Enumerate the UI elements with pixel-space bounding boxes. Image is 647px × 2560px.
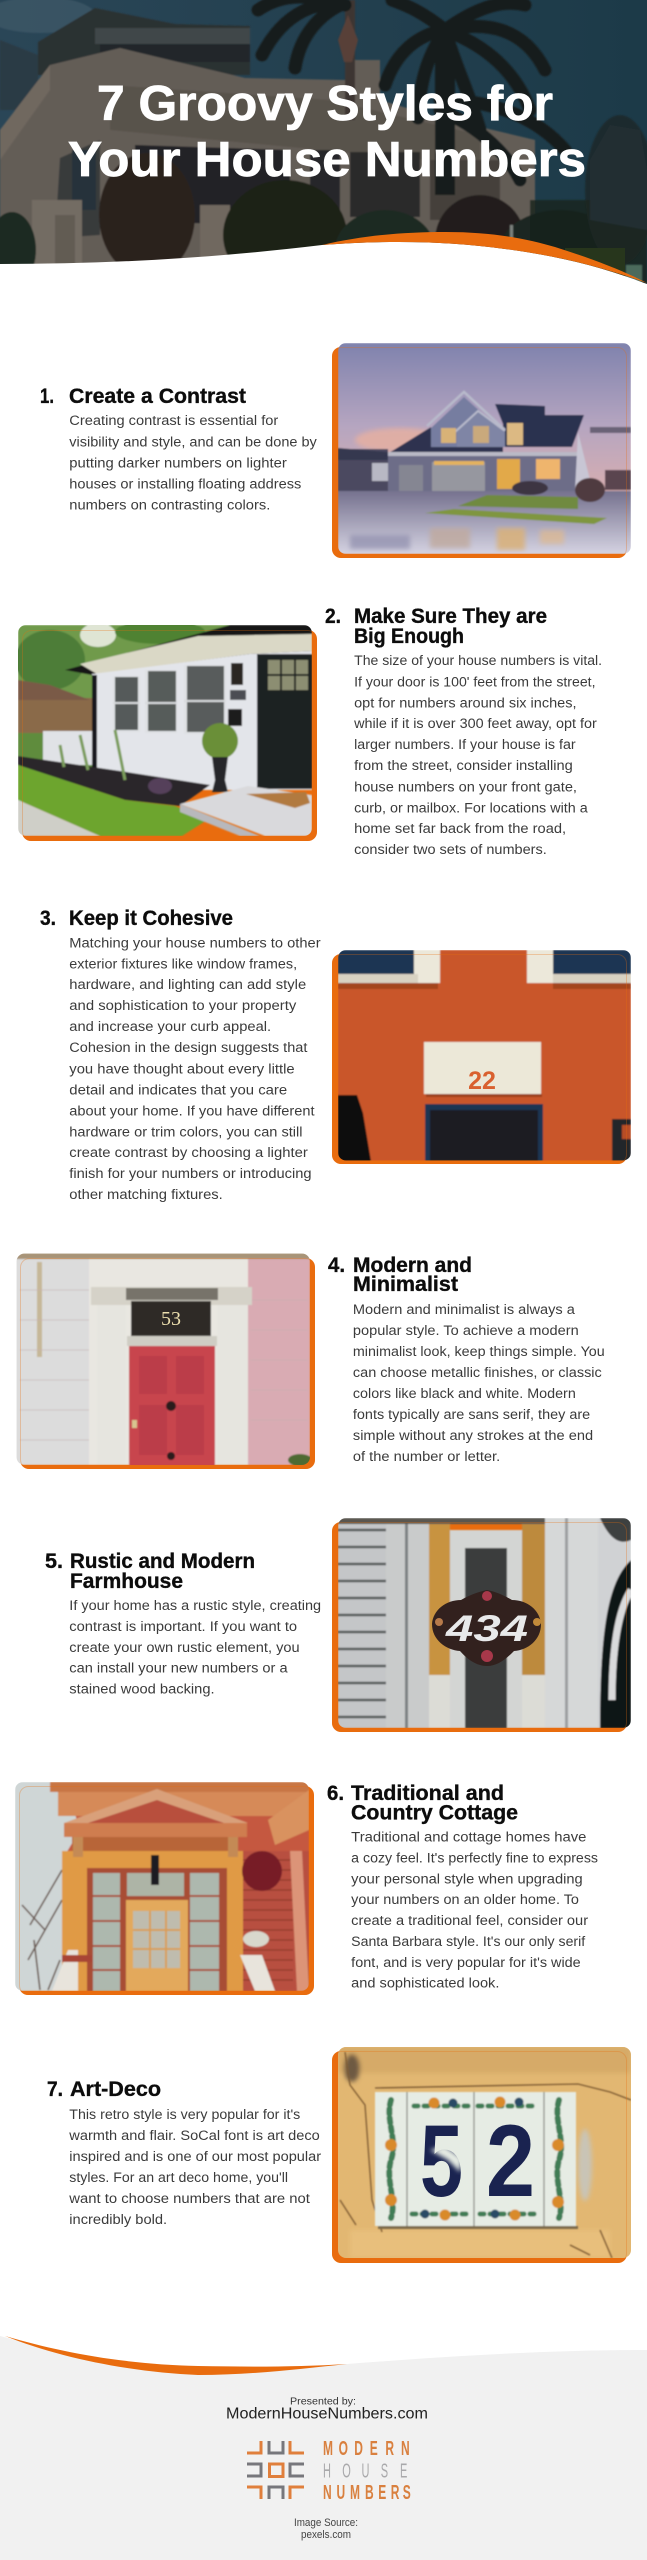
heading 2: Make Sure They are: [354, 605, 547, 628]
body text 1: visibility and style, and can be done by: [69, 434, 317, 449]
section 3: Keep it Cohesive: [40, 907, 631, 1202]
house number 52: 5: [420, 2104, 463, 2218]
body text 3: and sophistication to your property: [69, 998, 297, 1013]
body text 6: [351, 1830, 598, 1991]
body text 5: If your home has a rustic style, creating: [69, 1598, 321, 1613]
body text 5: stained wood backing.: [69, 1682, 215, 1696]
body text 2: If your door is 100' feet from the street,: [354, 674, 596, 689]
body text 2: from the street, consider installing: [354, 758, 573, 773]
house number 22: 22: [468, 1067, 496, 1095]
header wave: white curve: [0, 242, 647, 300]
body text 3: and increase your curb appeal.: [69, 1019, 271, 1034]
body text 7: styles. For an art deco home, you'll: [69, 2170, 288, 2185]
body text 5: create your own rustic element, you: [69, 1640, 300, 1655]
heading 4: 4.: [328, 1254, 345, 1277]
heading 3: Keep it Cohesive: [69, 907, 233, 930]
body text 4: popular style. To achieve a modern: [353, 1323, 579, 1338]
body text 2: curb, or mailbox. For locations with a: [354, 800, 588, 815]
heading 5: Farmhouse: [70, 1570, 183, 1593]
body text 2: opt for numbers around six inches,: [354, 695, 576, 710]
heading 7: Art-Deco: [70, 2078, 161, 2101]
logo wordmark: HOUSE: [323, 2460, 407, 2482]
body text 7: inspired and is one of our most popular: [69, 2149, 322, 2164]
footer wave: orange accent: [5, 2336, 347, 2375]
body text 3: create contrast by choosing a lighter: [69, 1145, 308, 1160]
heading 2: [325, 605, 547, 648]
body text 6: and sophisticated look.: [351, 1976, 499, 1991]
body text 6: Santa Barbara style. It's our only serif: [351, 1934, 585, 1949]
body text 2: home set far back from the road,: [354, 821, 566, 836]
heading 6: Country Cottage: [351, 1801, 518, 1824]
section 7: Art-Deco: [47, 2047, 631, 2263]
body text 4: Modern and minimalist is always a: [353, 1302, 575, 1317]
body text 2: [353, 653, 602, 857]
heading 6: Traditional and: [351, 1782, 504, 1805]
house number 434: 434: [445, 1608, 528, 1649]
body text 3: [69, 935, 321, 1202]
body text 2: The size of your house numbers is vital.: [354, 653, 602, 668]
image source credit: pexels.com: [301, 2529, 351, 2541]
heading 1: Create a Contrast: [69, 385, 246, 408]
body text 7: warmth and flair. SoCal font is art deco: [68, 2128, 320, 2143]
body text 2: consider two sets of numbers.: [354, 842, 547, 857]
body text 6: font, and is very popular for it's wide: [351, 1955, 581, 1970]
photo 7: tile number 52: [332, 2047, 631, 2263]
body text 1: houses or installing floating address: [69, 476, 302, 491]
heading 5: [45, 1550, 255, 1593]
title: Your House Numbers: [68, 133, 586, 187]
heading 5: 5.: [45, 1550, 63, 1573]
section 1: Create a Contrast: [40, 343, 631, 558]
heading 4: Modern and: [353, 1254, 472, 1277]
body text 7: This retro style is very popular for it's: [69, 2107, 301, 2122]
body text 3: finish for your numbers or introducing: [69, 1166, 312, 1181]
title: [68, 77, 586, 187]
body text 2: while if it is over 300 feet away, opt for: [353, 716, 597, 731]
body text 7: incredibly bold.: [69, 2212, 167, 2227]
heading 2: 2.: [325, 605, 341, 628]
photo 1: house at dusk: [332, 343, 631, 558]
body text 5: [69, 1598, 321, 1696]
house number 53: 53: [161, 1308, 181, 1330]
header wave: orange accent: [322, 232, 647, 283]
logo wordmark: MODERN: [323, 2438, 410, 2460]
body text 3: hardware or trim colors, you can still: [69, 1124, 302, 1139]
photo 6: orange cottage porch: [15, 1782, 314, 1995]
heading 4: Minimalist: [353, 1273, 458, 1296]
body text 5: contrast is important. If you want to: [69, 1619, 297, 1634]
heading 3: 3.: [40, 907, 56, 930]
photo 3: orange wall with number 22: [332, 950, 631, 1164]
house number 52: [422, 2124, 532, 2197]
body text 4: colors like black and white. Modern: [353, 1386, 576, 1401]
body text 1: Creating contrast is essential for: [69, 413, 279, 428]
presented by credit: ModernHouseNumbers.com: [226, 2406, 428, 2422]
body text 1: numbers on contrasting colors.: [69, 498, 270, 512]
body text 3: other matching fixtures.: [69, 1187, 223, 1202]
title: 7 Groovy Styles for: [97, 77, 553, 131]
body text 6: your numbers on an older home. To: [351, 1892, 579, 1907]
house number 52: 2: [486, 2104, 535, 2218]
body text 4: of the number or letter.: [353, 1449, 500, 1464]
photo 2: white house with black door: [15, 620, 317, 841]
image source credit: [294, 2517, 358, 2541]
heading 5: Rustic and Modern: [70, 1550, 255, 1573]
section 5: Rustic and Modern Farmhouse: [45, 1518, 631, 1732]
body text 1: [69, 413, 317, 512]
body text 3: exterior fixtures like window frames,: [69, 956, 297, 971]
section 4: Modern and Minimalist: [16, 1253, 605, 1469]
body text 6: Traditional and cottage homes have: [351, 1830, 586, 1844]
body text 4: minimalist look, keep things simple. You: [353, 1344, 605, 1359]
body text 2: house numbers on your front gate,: [354, 779, 577, 794]
body text 3: about your home. If you have different: [69, 1103, 315, 1118]
body text 4: fonts typically are sans serif, they are: [353, 1407, 590, 1422]
body text 3: hardware, and lighting can add style: [69, 977, 306, 992]
header banner photo: [0, 0, 647, 295]
photo 4: red door with number 53: [16, 1253, 315, 1469]
heading 6: 6.: [327, 1782, 344, 1805]
heading 4: [328, 1254, 472, 1296]
logo wordmark: [323, 2438, 411, 2504]
body text 4: simple without any strokes at the end: [353, 1428, 593, 1443]
photo 5: rustic 434 plaque: [332, 1518, 631, 1732]
heading 6: [327, 1782, 518, 1824]
body text 6: a cozy feel. It's perfectly fine to express: [351, 1850, 598, 1866]
section 6: Traditional and Country Cottage: [15, 1782, 598, 1995]
section 2: Make Sure They are Big Enough: [15, 605, 602, 857]
body text 4: can choose metallic finishes, or classic: [353, 1365, 602, 1380]
body text 3: Matching your house numbers to other: [69, 935, 321, 950]
body text 1: putting darker numbers on lighter: [69, 455, 287, 470]
logo mark: [247, 2441, 304, 2499]
heading 7: 7.: [47, 2078, 63, 2101]
body text 6: create a traditional feel, consider our: [351, 1913, 589, 1928]
body text 3: you have thought about every little: [69, 1061, 295, 1076]
body text 3: Cohesion in the design suggests that: [69, 1040, 308, 1055]
presented by credit: [226, 2396, 428, 2422]
body text 4: [353, 1302, 605, 1464]
logo wordmark: NUMBERS: [323, 2482, 411, 2504]
heading 1: 1.: [40, 385, 54, 408]
body text 6: your personal style when upgrading: [351, 1872, 583, 1886]
presented by credit: Presented by:: [290, 2396, 356, 2408]
body text 3: detail and indicates that you care: [69, 1082, 287, 1097]
image source credit: Image Source:: [294, 2517, 358, 2529]
body text 7: [68, 2107, 322, 2227]
footer panel: [0, 2336, 647, 2560]
body text 5: can install your new numbers or a: [69, 1661, 288, 1676]
logo: Modern House Numbers: [247, 2438, 411, 2504]
body text 7: want to choose numbers that are not: [68, 2191, 310, 2206]
body text 2: larger numbers. If your house is far: [354, 737, 576, 752]
heading 2: Big Enough: [354, 625, 464, 648]
